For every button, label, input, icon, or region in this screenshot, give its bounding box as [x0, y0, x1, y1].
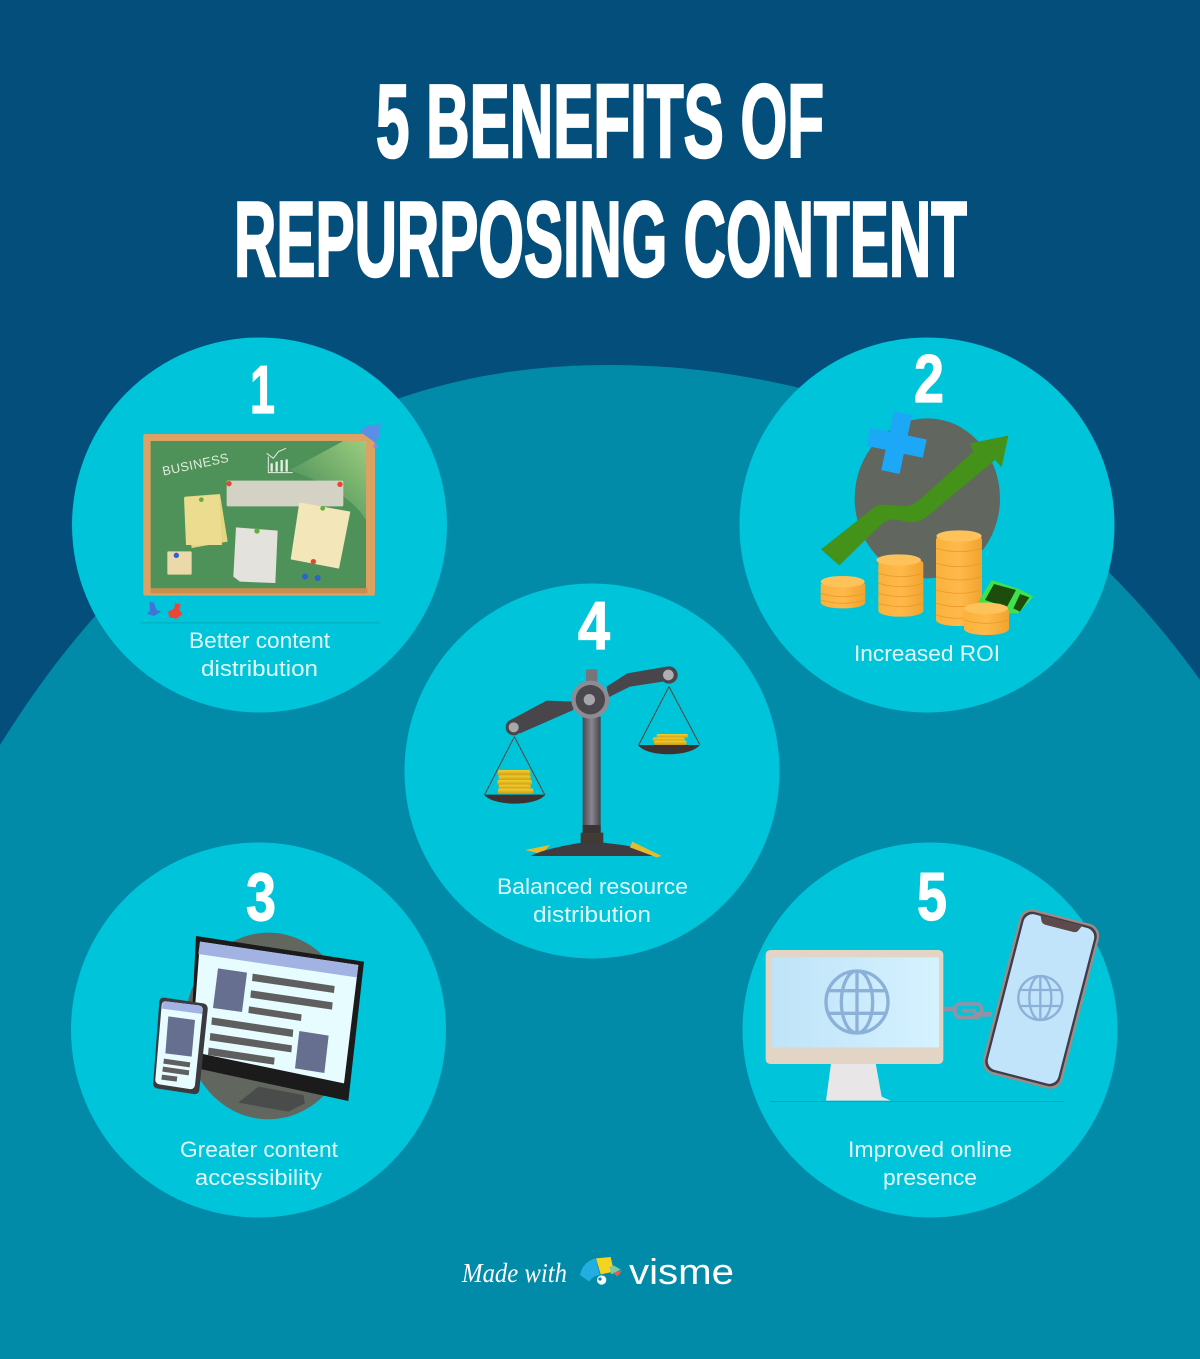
panel: benefit 4 [404, 584, 780, 958]
label 5 [848, 1137, 1012, 1190]
label 2: Increased ROI [854, 641, 1000, 666]
icon: chain [943, 1004, 992, 1017]
number 5: 5 [917, 859, 947, 935]
icon: plus [862, 407, 931, 478]
scale beam [507, 667, 673, 733]
icon: smartphone [980, 906, 1102, 1092]
icon: bulletin board: BUSINESS [161, 451, 230, 479]
icon: chalk chart [267, 448, 293, 473]
icon: red pin [168, 603, 183, 619]
title [234, 64, 967, 299]
icon: phone [153, 998, 208, 1094]
panel: benefit 2 [740, 338, 1114, 712]
icon: globe on phone [1018, 976, 1062, 1020]
number 1: 1 [250, 352, 275, 428]
label 5: Improved online [848, 1137, 1012, 1162]
icon: coin stacks [821, 530, 1033, 635]
panel: benefit 3 [71, 842, 446, 1218]
icon: balance scale [484, 666, 700, 857]
number 2: 2 [914, 341, 944, 417]
footer: made with visme [461, 1251, 734, 1292]
icon: bulletin board [140, 422, 381, 623]
right pan [638, 687, 700, 754]
label 3 [180, 1137, 339, 1190]
icon: ROI growth [821, 407, 1033, 635]
label 1: Better content [189, 628, 331, 653]
icon: green arrow [821, 436, 1008, 565]
label 1: distribution [201, 656, 318, 681]
label 1 [189, 628, 331, 681]
number 4: 4 [578, 588, 610, 664]
label 3: accessibility [195, 1165, 323, 1190]
left pan [484, 737, 545, 804]
panel: benefit 5 [742, 842, 1118, 1218]
icon: linked devices [766, 906, 1102, 1102]
label 4: distribution [533, 902, 651, 927]
icon: devices [153, 933, 364, 1119]
label 5: presence [883, 1165, 977, 1190]
number 3: 3 [246, 859, 276, 935]
title: 5 BENEFITS OF [376, 64, 824, 180]
panel: benefit 1 [72, 338, 447, 712]
made with text: Made with [461, 1258, 567, 1288]
icon: globe on monitor [826, 971, 888, 1033]
background arch [0, 365, 1200, 1359]
visme wordmark: visme [629, 1251, 734, 1292]
label 4 [497, 874, 688, 927]
label 3: Greater content [180, 1137, 339, 1162]
icon: lamp [360, 422, 381, 448]
label 4: Balanced resource [497, 874, 688, 899]
icon: visme logo [580, 1257, 622, 1285]
icon: blue pin [147, 602, 161, 616]
